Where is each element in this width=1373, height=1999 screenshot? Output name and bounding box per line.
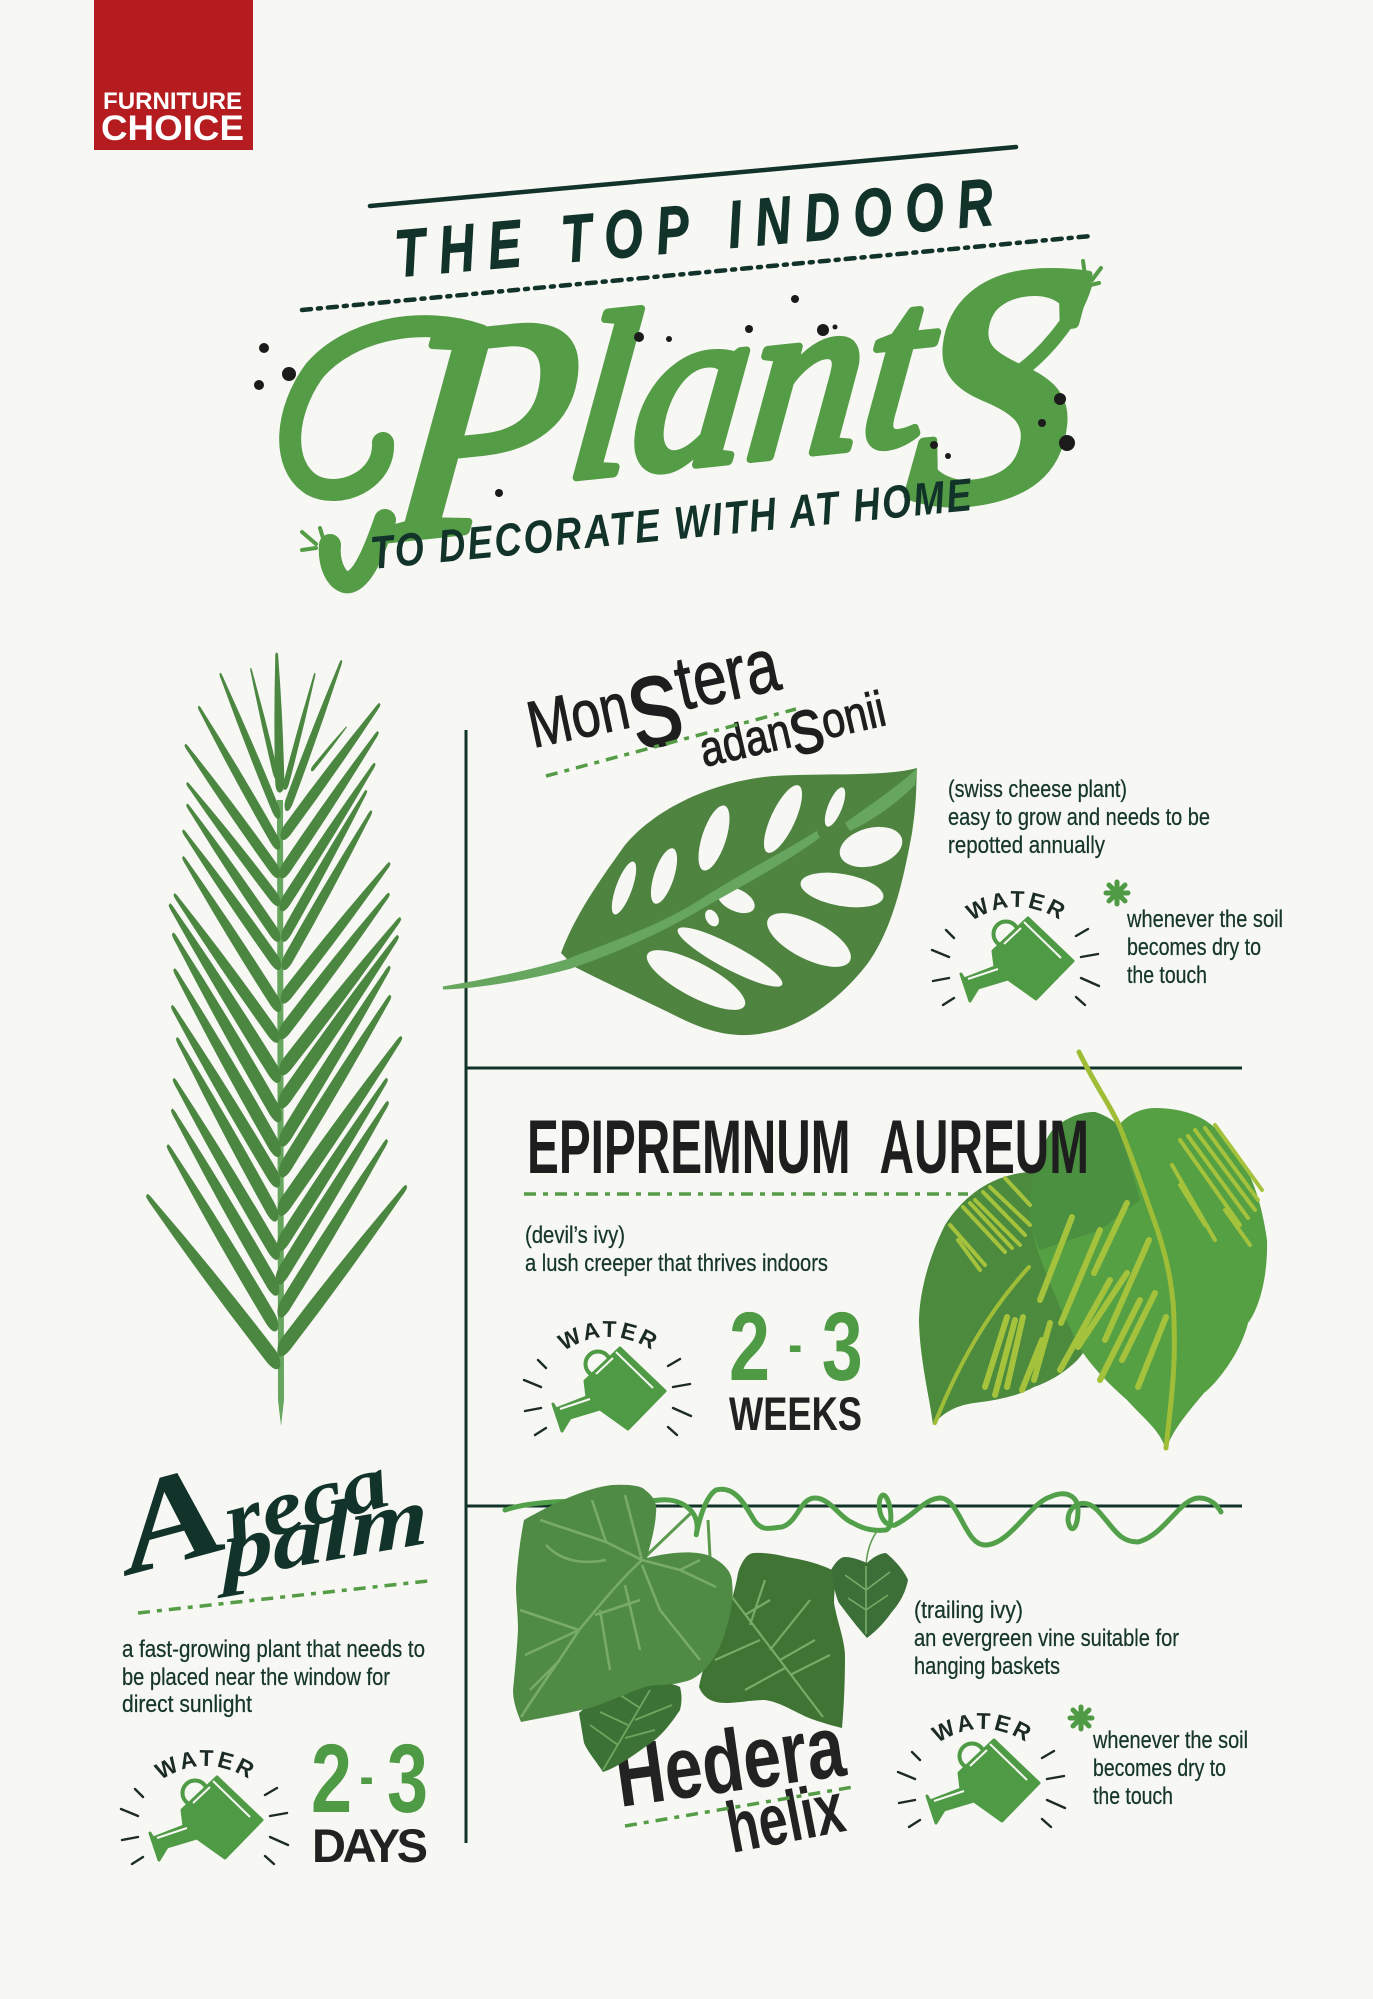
description: hedera: an evergreen vine suitable for <box>914 1625 1179 1652</box>
watering frequency: 2-3 weeks: 2 <box>729 1293 770 1401</box>
description: epipremnum: (devil’s ivy) <box>525 1222 625 1249</box>
heading: Plants <box>290 69 1123 662</box>
note: watering: whenever the soil <box>1092 1727 1248 1754</box>
description: hedera: (trailing ivy) <box>914 1597 1023 1624</box>
note: watering <box>1092 1727 1248 1810</box>
heading: To decorate with at home: TO DECORATE WITH AT HOME <box>368 468 975 579</box>
leaf: small bottom <box>579 1677 682 1772</box>
panel: epipremnum aureum <box>522 1050 1268 1450</box>
panel: monstera adansonii <box>442 622 1283 1036</box>
leaf: large <box>513 1485 733 1722</box>
illustration: monstera leaf <box>443 768 917 1035</box>
heading: Monstera adansonii <box>513 603 894 799</box>
watering frequency: 2-3 weeks: WEEKS <box>729 1387 862 1440</box>
icon: watering can <box>522 1321 692 1436</box>
heading: Monstera adansonii: s <box>779 679 832 773</box>
heading: Areca palm: palm <box>213 1469 430 1600</box>
heading: Plants: s <box>891 69 1123 607</box>
note: watering: becomes dry to <box>1093 1755 1226 1782</box>
description: areca palm: be placed near the window for <box>122 1664 390 1691</box>
watering frequency: 2-3 days <box>311 1725 428 1872</box>
heading: Monstera adansonii: Mon <box>521 668 635 762</box>
frame lines <box>466 730 1242 1843</box>
logo: Furniture Choice: CHOICE <box>101 109 244 148</box>
note: watering: the touch <box>1093 1783 1173 1810</box>
watering frequency: 2-3 days: 3 <box>387 1725 428 1833</box>
panel: hedera helix <box>502 1484 1248 1869</box>
icon: watering can: WATER <box>153 1750 254 1778</box>
icon: watering can: WATER <box>556 1321 656 1350</box>
watering frequency: 2-3 weeks: 3 <box>822 1293 863 1401</box>
description: areca palm <box>122 1636 425 1718</box>
note: watering <box>1126 906 1283 989</box>
icon: watering can: WATER <box>930 1713 1030 1742</box>
watering frequency: 2-3 weeks <box>729 1293 863 1440</box>
description: epipremnum: a lush creeper that thrives indoors <box>525 1250 828 1277</box>
description: monstera: repotted annually <box>948 832 1105 859</box>
description: monstera <box>948 776 1210 859</box>
description: hedera <box>914 1597 1179 1680</box>
heading: Areca palm <box>94 1393 430 1604</box>
heading: Hedera helix: Hedera <box>609 1696 851 1826</box>
heading: Monstera adansonii: tera <box>667 622 787 727</box>
heading: Monstera adansonii: s <box>613 624 694 778</box>
description: epipremnum <box>525 1222 828 1277</box>
note: watering: becomes dry to <box>1127 934 1261 961</box>
description: monstera: easy to grow and needs to be <box>948 804 1210 831</box>
heading: Hedera helix: helix <box>720 1768 851 1869</box>
icon: asterisk <box>1106 882 1128 904</box>
icon: watering can <box>930 891 1100 1006</box>
description: hedera: hanging baskets <box>914 1653 1060 1680</box>
watering frequency: 2-3 days: 2 <box>311 1725 352 1833</box>
title block <box>254 69 1123 662</box>
leaf: second <box>699 1553 845 1728</box>
heading: Plants: lant <box>560 233 948 529</box>
description: monstera: (swiss cheese plant) <box>948 776 1127 803</box>
decorative dots and ticks <box>254 261 1101 550</box>
icon: asterisk <box>1070 1707 1092 1729</box>
logo: Furniture Choice <box>94 0 253 150</box>
icon: watering can: WATER <box>964 891 1064 920</box>
description: areca palm: direct sunlight <box>122 1691 252 1718</box>
watering frequency: 2-3 days: - <box>360 1747 374 1807</box>
icon: watering can <box>896 1713 1066 1828</box>
heading: The top indoor: THE TOP INDOOR <box>392 166 996 292</box>
leaf: tiny <box>831 1553 908 1638</box>
watering frequency: 2-3 weeks: - <box>788 1315 802 1375</box>
note: watering: the touch <box>1127 962 1207 989</box>
note: watering: whenever the soil <box>1126 906 1283 933</box>
description: areca palm: a fast-growing plant that needs to <box>122 1636 425 1663</box>
illustration: palm frond <box>143 653 410 1426</box>
heading: Plants: P <box>372 249 594 606</box>
panel: areca palm <box>94 652 470 1872</box>
icon: watering can <box>120 1750 290 1866</box>
logo: Furniture Choice: FURNITURE <box>103 88 242 115</box>
illustration: pothos leaves <box>919 1052 1267 1450</box>
illustration: ivy vine <box>505 1485 1221 1772</box>
heading: Hedera helix <box>609 1696 851 1869</box>
heading: Monstera adansonii: adan <box>694 703 796 778</box>
heading: Areca palm: Areca <box>94 1393 400 1604</box>
heading: Monstera adansonii: onii <box>815 681 891 750</box>
watering frequency: 2-3 days: DAYS <box>312 1819 428 1872</box>
